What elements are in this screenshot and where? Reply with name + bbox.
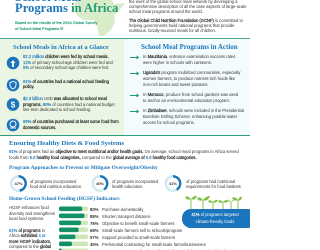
bar labels: Objective to benefit small-scale farmers	[102, 221, 174, 226]
GCNF text: helping governments build national programs that provide	[129, 22, 234, 28]
bar labels: Preferential contracting for small-scale farms/businesses	[102, 242, 206, 247]
Zimbabwe: access for school programs.	[143, 120, 195, 125]
Zimbabwe: Borehole Drilling Scheme, enhancing potable water	[143, 114, 237, 119]
heading: School Meals in Africa at a Glance	[13, 44, 109, 50]
Uganda: iron-rich beans and sweet potatoes.	[143, 82, 209, 87]
callout text: climate-friendly foods	[196, 218, 234, 224]
bar labels: Shorten transport distance	[102, 214, 151, 219]
Uganda: Uganda's program mobilized communities, especially	[143, 70, 240, 75]
title: Programs in Africa	[15, 1, 118, 15]
donut text 2: health education	[112, 184, 142, 189]
bar labels	[102, 207, 249, 250]
HGSF text	[9, 205, 55, 221]
Zimbabwe	[143, 108, 244, 125]
donuts: 41%	[169, 181, 177, 186]
subheading: approaches: Program Approaches to Prevent or Mitigate Overweight/Obesity	[9, 164, 158, 170]
green rule bottom	[0, 134, 250, 136]
heading: School Meal Programs in Action	[141, 42, 238, 50]
HGSF text: diversity and strengthens	[9, 211, 55, 216]
item: domestic: 69% of countries purchased at least some food from	[23, 119, 119, 124]
Mauritania	[143, 54, 236, 65]
green rule top	[0, 38, 250, 39]
Uganda: women farmers, to produce nutrient-rich foods like	[143, 76, 235, 81]
intro text	[129, 0, 246, 14]
HGSF finding: 61% of programs in	[9, 228, 45, 232]
donut text 3	[186, 178, 241, 189]
item: policy: 91% of countries had a national school feeding	[23, 78, 109, 84]
bar labels: Support provided to small-scale farmers	[102, 235, 175, 240]
bar values: 57%	[90, 235, 99, 240]
map of Africa	[74, 0, 125, 36]
donuts	[10, 175, 182, 192]
item: budget: line item dedicated to school feeding.	[23, 107, 91, 112]
subtitle: Based on the results of the 2024 Global Survey	[15, 20, 98, 25]
GCNF text	[129, 18, 243, 33]
intro text: school meal programs around the world.	[129, 9, 203, 14]
bar values: 76%	[90, 221, 99, 226]
item: children fed: 82.2 million children were fed by school meals.	[23, 54, 109, 59]
callout text: 41% of programs targeted	[191, 212, 239, 217]
HGSF finding	[9, 228, 51, 250]
heading: HGSF: Home-Grown School Feeding (HGSF) Indicators	[9, 196, 120, 202]
donut text 3: of programs had nutritional	[186, 178, 235, 184]
callout: climate-friendly foods	[182, 209, 257, 228]
HGSF finding: Africa exhibited 4 or	[9, 233, 46, 238]
item: budget	[23, 96, 115, 112]
HGSF text: local food systems.	[9, 216, 44, 221]
item: budget: $2.3 billion USD was allocated to school meal	[23, 96, 107, 101]
intro text: comprehensive description of all the case aspects of large-scale	[129, 4, 246, 9]
bar values: 80%	[90, 207, 99, 212]
subtitle	[15, 20, 98, 32]
icon: seedlings	[185, 196, 242, 209]
donuts: 40%	[96, 181, 104, 186]
Mauritania: were higher in schools with canteens.	[143, 60, 212, 65]
heading: healthy diets: Ensuring Healthy Diets & Food Systems	[9, 140, 124, 147]
Morocco: In Morocco, produce from school gardens was used	[143, 92, 238, 97]
bar values: 68%	[90, 228, 99, 233]
bar values: 45%	[90, 242, 99, 247]
donut text 3: requirements for food baskets	[186, 184, 241, 189]
donut text 1: food and nutrition education	[30, 184, 81, 189]
HGSF finding: more HGSF indicators,	[9, 239, 51, 244]
Uganda	[143, 70, 240, 87]
icons	[6, 56, 20, 132]
HGSF text: HGSF enhances food	[9, 205, 49, 210]
donut text 2	[112, 178, 158, 189]
item: domestic	[23, 119, 119, 130]
donut text 2: of programs incorporated	[112, 178, 158, 184]
callout text	[191, 212, 239, 224]
item: policy	[23, 78, 109, 90]
paragraph: 91% of programs had an objective to meet nutritional and/or health goals. On average, school meal programs in Africa served	[9, 149, 239, 154]
paragraph	[9, 149, 239, 160]
item: budget: programs. 80% of countries had a national budget	[23, 102, 115, 107]
donut text 1	[30, 178, 81, 189]
icons: $	[11, 100, 16, 110]
GCNF text: The Global Child Nutrition Foundation (GCNF) is committed to	[129, 18, 243, 22]
donut text 1: of programs incorporated	[30, 178, 76, 184]
panel: programs in action	[124, 38, 250, 135]
bar labels: Small-scale farmers sell to schools/program	[102, 228, 182, 233]
Morocco: to anchor an environmental education program.	[143, 98, 230, 103]
paragraph: foods from 5.9 healthy food categories, compared to the global average of 6.8 healthy food categories.	[9, 155, 197, 160]
panel: school meals at a glance	[0, 38, 124, 135]
item: domestic: domestic sources.	[23, 125, 56, 130]
Zimbabwe: In Zimbabwe, schools were included in the Presidential	[143, 108, 244, 113]
HGSF finding: compared to the global	[9, 244, 51, 249]
arrows	[130, 56, 140, 114]
item: children fed: 5% of secondary school-age children were fed.	[23, 65, 109, 70]
bar values	[90, 207, 99, 250]
item: children fed: 11% of primary school-age children were fed and	[23, 60, 113, 65]
Morocco	[143, 92, 238, 103]
bar chart	[59, 206, 88, 250]
donuts: 47%	[14, 181, 23, 186]
Mauritania: In Mauritania, entrance examination success rates	[143, 54, 235, 59]
item: children fed	[23, 54, 113, 70]
bar labels: Purchase domestically	[102, 207, 143, 212]
bar values: 88%	[90, 214, 99, 219]
GCNF text: nutritious, locally-sourced meals for all children.	[129, 28, 216, 32]
subtitle: of School Meal Programs ©	[15, 26, 63, 31]
item: policy: policy.	[23, 84, 34, 89]
